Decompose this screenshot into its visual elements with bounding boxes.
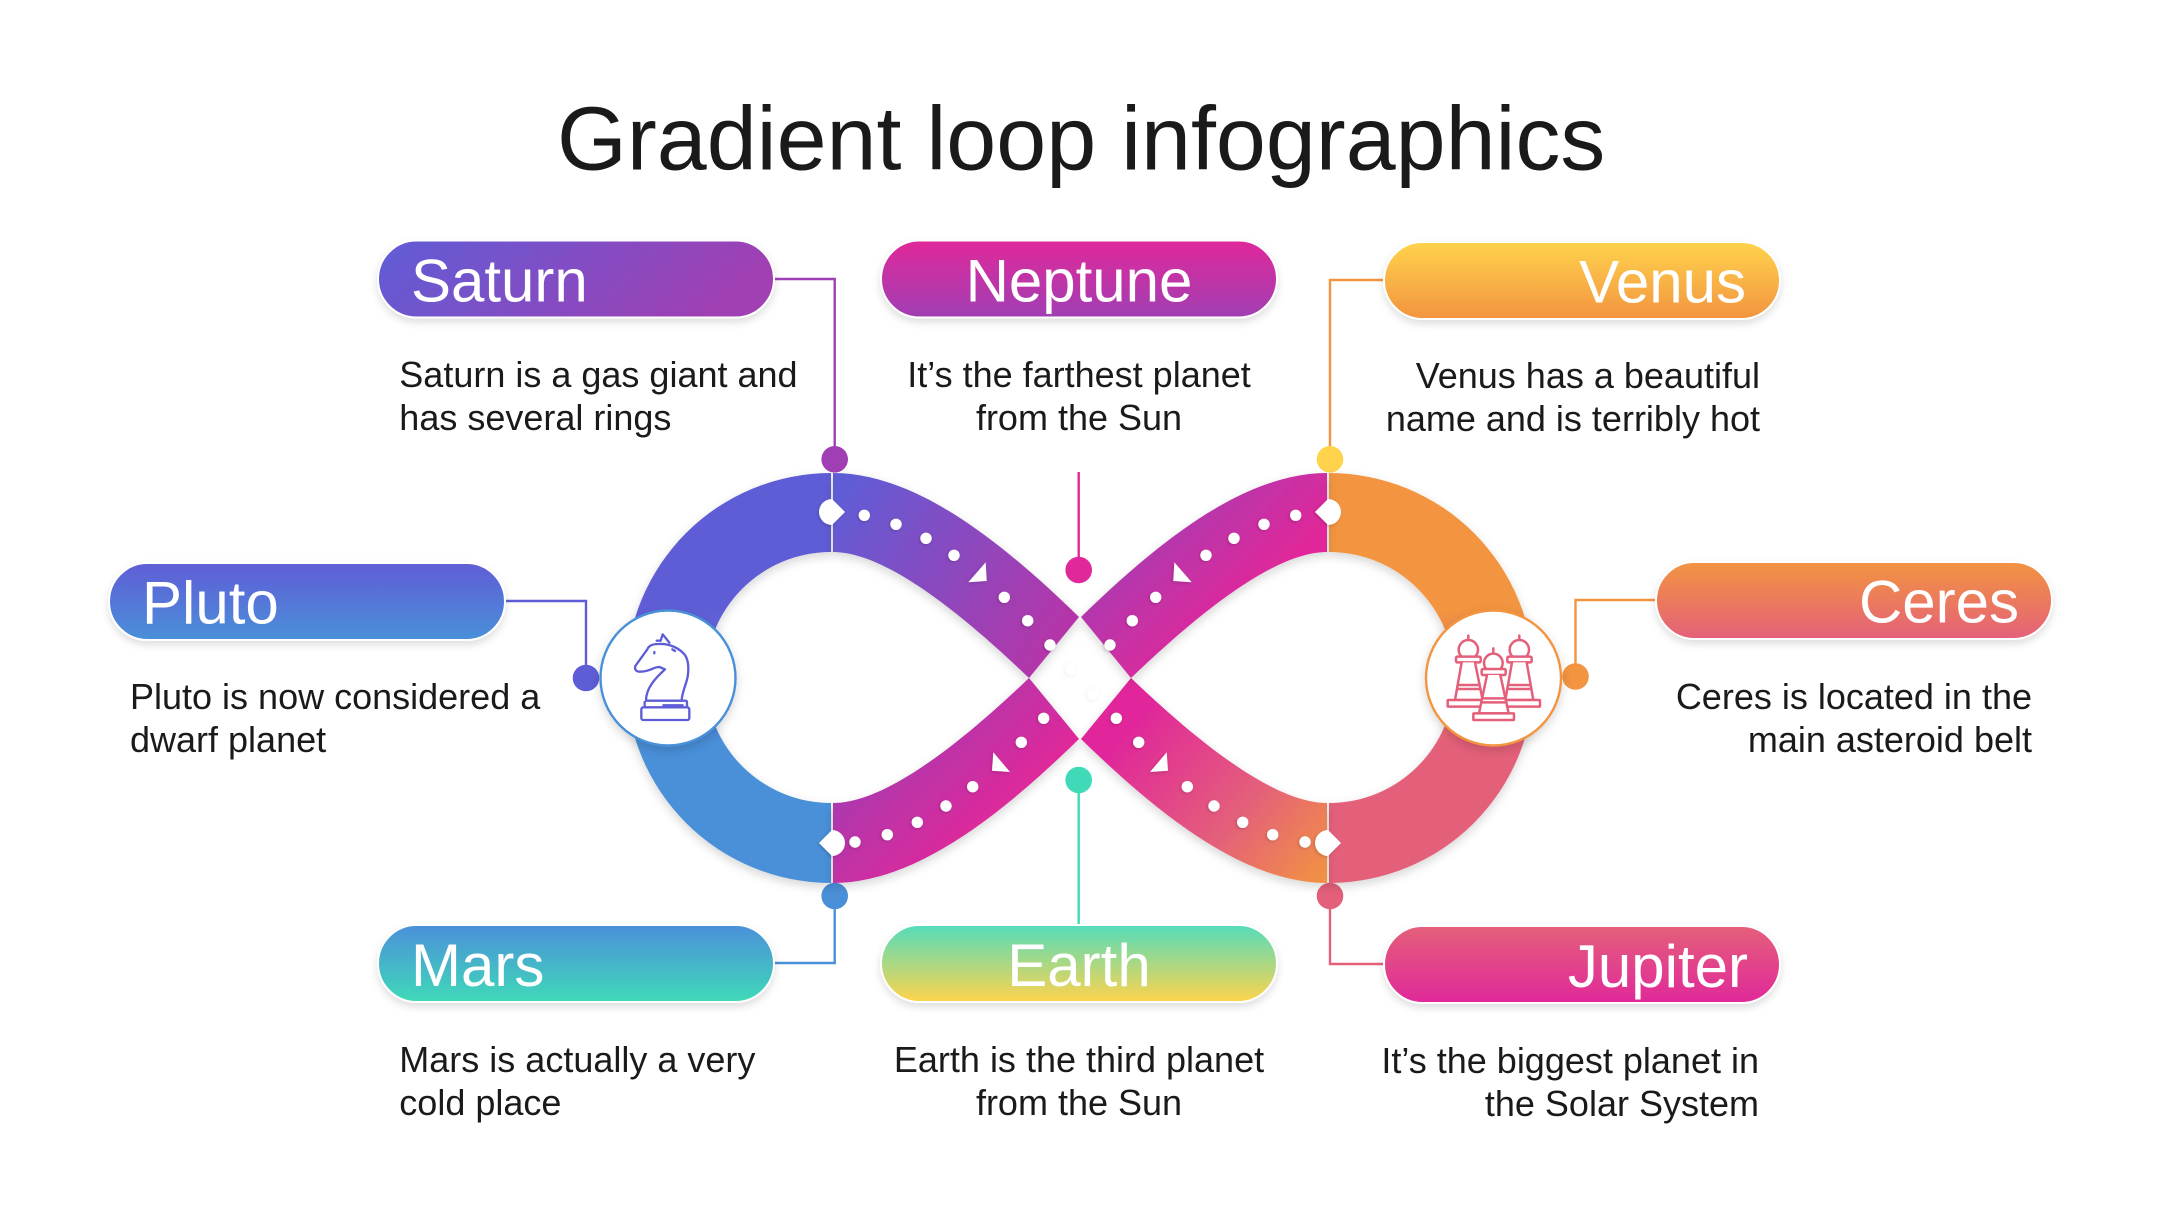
text: Jupiter description: It’s the biggest planet in — [1381, 1040, 1759, 1081]
title: Gradient loop infographics — [557, 90, 1605, 190]
panel: Ceres — [1656, 562, 2052, 760]
panel: Earth — [881, 925, 1277, 1123]
text: Pluto description: Pluto is now considered a — [130, 676, 540, 717]
text: Venus description: name and is terribly hot — [1386, 398, 1760, 439]
label pill: Mars — [378, 925, 774, 1002]
connector: Saturn — [775, 279, 848, 473]
dots: top right path — [1104, 510, 1301, 651]
loop segment: left arc — [626, 473, 831, 883]
marker: top left — [819, 499, 845, 525]
label pill: Mars: Mars — [411, 932, 544, 999]
marker: bottom right — [1315, 830, 1341, 856]
dots: centre crossing — [1065, 664, 1099, 700]
label pill: Saturn — [378, 240, 774, 318]
dots: bottom right path — [1111, 713, 1311, 848]
loop segment: bottom left ribbon — [833, 678, 1079, 883]
label pill: Jupiter: Jupiter — [1568, 933, 1748, 1000]
label pill: Saturn: Saturn — [411, 248, 588, 314]
label pill: Earth: Earth — [1007, 932, 1151, 999]
text: Earth description: from the Sun — [976, 1082, 1182, 1123]
panel: Neptune — [881, 240, 1277, 438]
panel: Jupiter — [1381, 926, 1780, 1124]
icon badge: knight — [600, 610, 736, 746]
text: Neptune description: It’s the farthest planet — [907, 354, 1251, 395]
text: Ceres description: main asteroid belt — [1748, 719, 2032, 760]
arrow: top left — [968, 562, 987, 582]
loop segment: top left ribbon — [833, 473, 1079, 678]
dots: bottom left path — [849, 713, 1049, 848]
text: Venus description: Venus has a beautiful — [1416, 355, 1760, 396]
text: Jupiter description: the Solar System — [1485, 1083, 1759, 1124]
arrow: top right — [1173, 562, 1192, 582]
label pill: Jupiter — [1384, 926, 1780, 1003]
text: Earth description: Earth is the third planet — [894, 1039, 1264, 1080]
connector: Mars — [773, 883, 848, 963]
text: Neptune description: from the Sun — [976, 397, 1182, 438]
connector: Pluto — [506, 601, 599, 691]
text: Saturn description: has several rings — [399, 397, 671, 438]
icon: chess knight — [635, 634, 689, 720]
text: Mars description: cold place — [399, 1082, 561, 1123]
label pill: Ceres: Ceres — [1859, 568, 2019, 636]
panel: Saturn — [378, 240, 798, 438]
text: Pluto description: dwarf planet — [130, 719, 326, 760]
loop segment: top right ribbon — [1081, 473, 1327, 678]
infinity loop — [626, 473, 1534, 883]
loop segment: bottom right ribbon — [1081, 678, 1327, 883]
connector: Venus — [1317, 280, 1385, 473]
arrow: bottom left — [992, 752, 1010, 772]
label pill: Pluto: Pluto — [142, 570, 279, 636]
label pill: Venus — [1384, 242, 1780, 319]
connector: Earth — [1065, 767, 1092, 926]
marker: bottom left — [819, 830, 845, 856]
icon: chess pieces — [1448, 636, 1540, 720]
text: Mars description: Mars is actually a very — [399, 1039, 755, 1080]
panel: Pluto — [109, 563, 541, 760]
label pill: Ceres — [1656, 562, 2052, 639]
label pill: Venus: Venus — [1579, 248, 1746, 316]
panel: Venus — [1384, 242, 1780, 439]
label pill: Neptune: Neptune — [966, 248, 1192, 314]
arrow: bottom right — [1150, 752, 1168, 772]
label pill: Neptune — [881, 240, 1277, 318]
marker: top right — [1315, 499, 1341, 525]
text: Ceres description: Ceres is located in the — [1676, 676, 2032, 717]
text: Saturn description: Saturn is a gas giant and — [399, 354, 798, 395]
connector: Ceres — [1562, 600, 1657, 690]
dots: top left path — [859, 510, 1056, 651]
connector: Jupiter — [1317, 883, 1385, 964]
label pill: Pluto — [109, 563, 505, 640]
loop segment: right arc — [1329, 473, 1534, 883]
icon badge: bishops — [1426, 610, 1561, 746]
panel: Mars — [378, 925, 774, 1123]
label pill: Earth — [881, 925, 1277, 1002]
connector: Neptune — [1065, 472, 1092, 583]
